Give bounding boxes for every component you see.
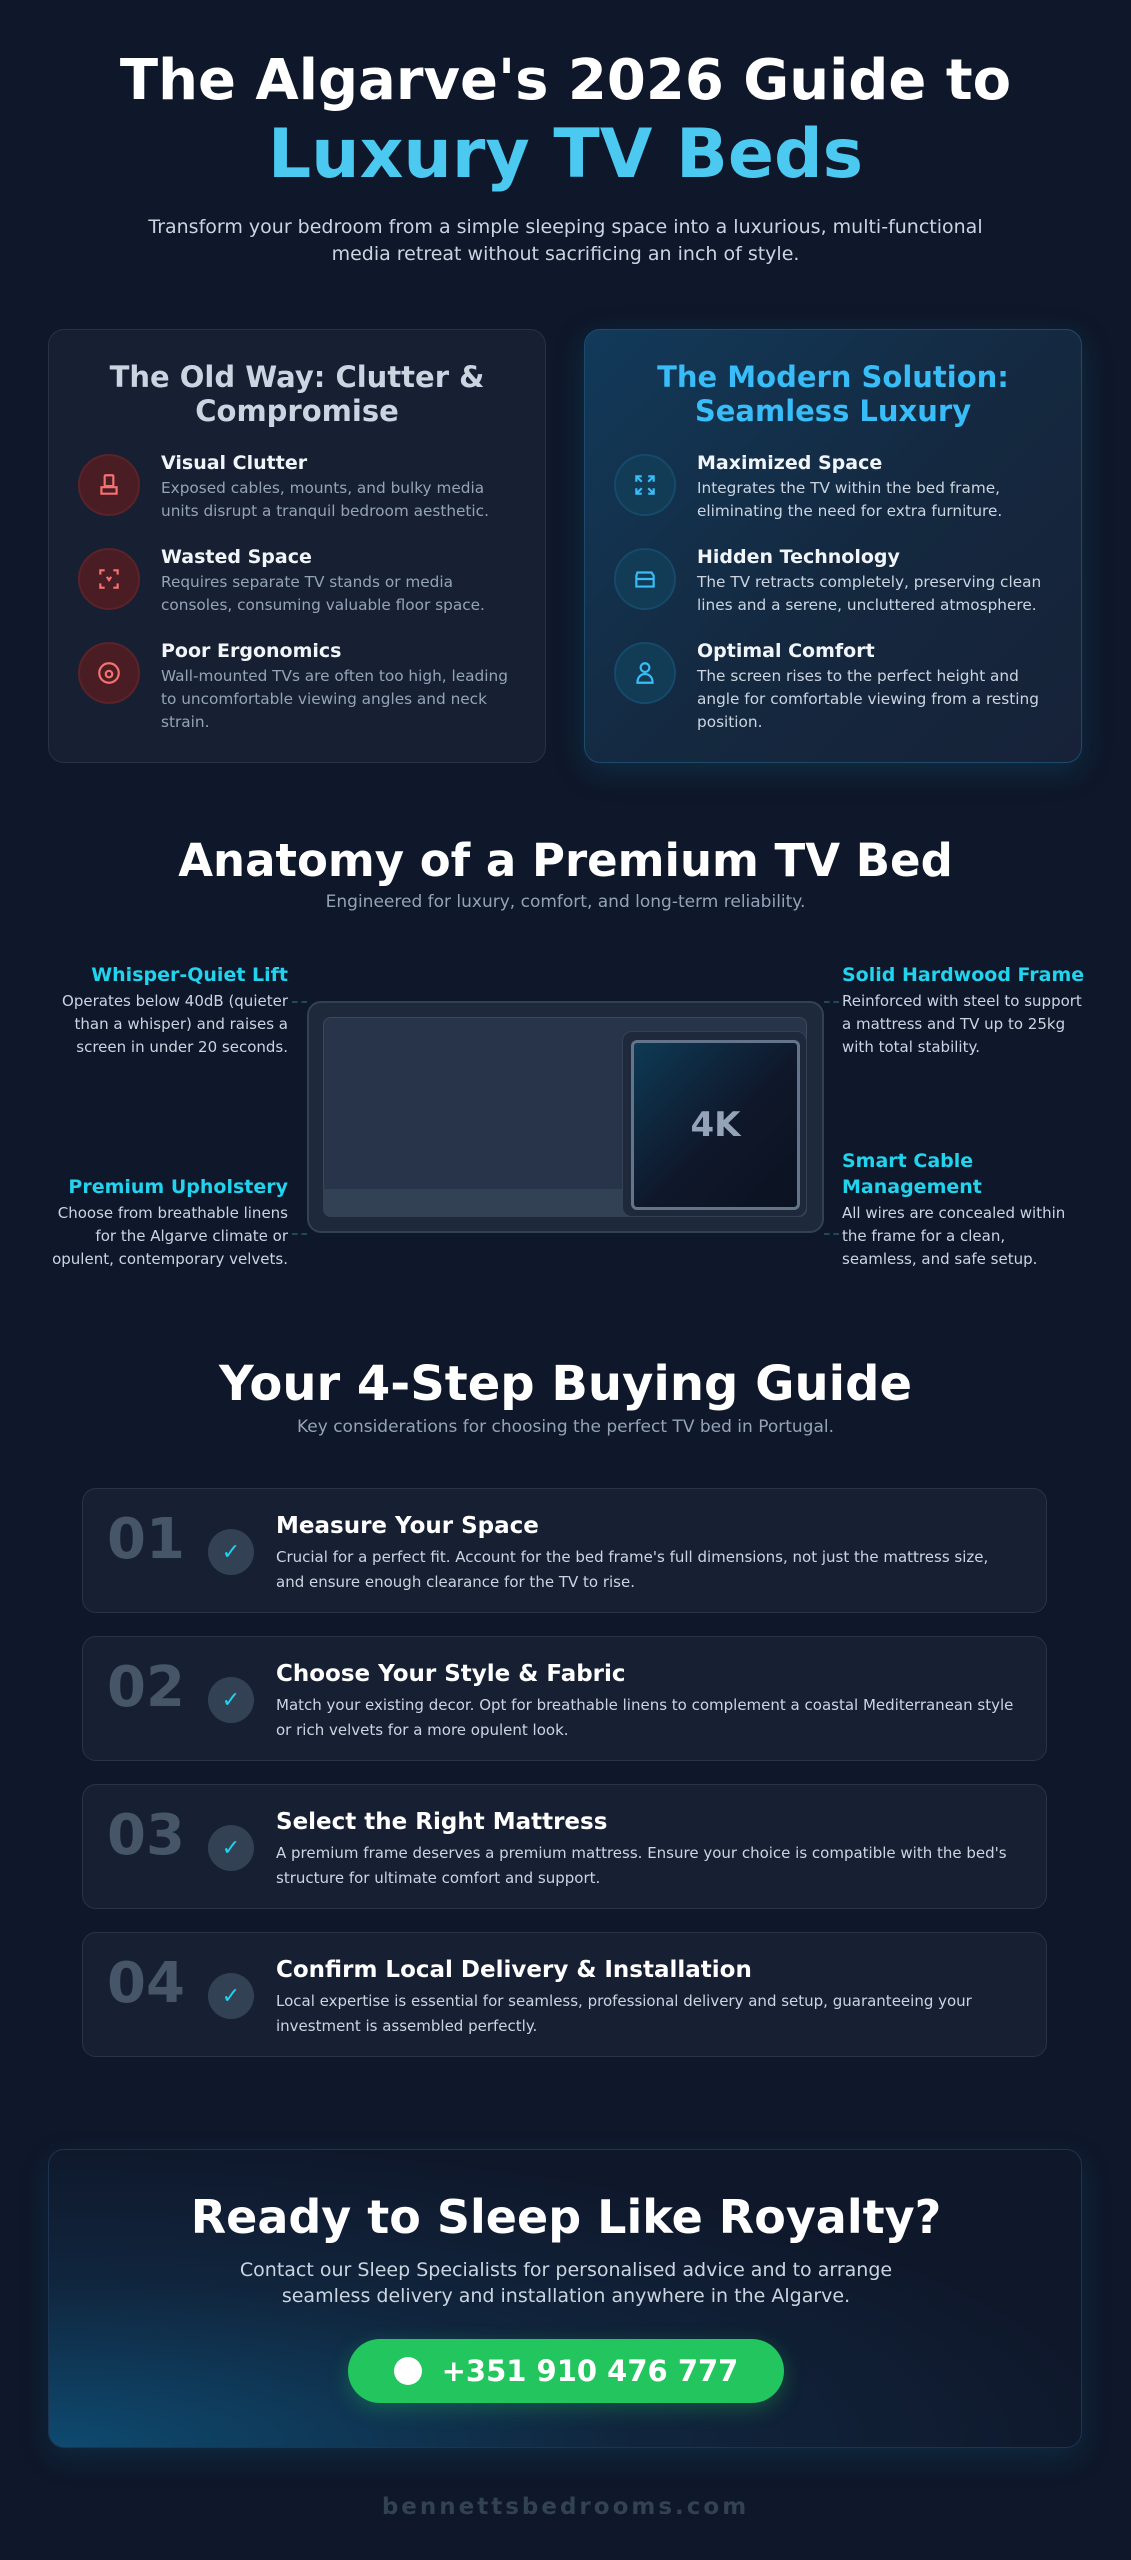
label: smart cable management: All wires are concealed within xyxy=(842,1204,1065,1222)
title xyxy=(120,48,1011,194)
step 2: or rich velvets for a more opulent look. xyxy=(276,1721,569,1739)
subtitle: media retreat without sacrificing an inch of style. xyxy=(332,243,799,265)
label: whisper-quiet lift: than a whisper) and raises a xyxy=(75,1015,288,1033)
panel: modern solution xyxy=(584,329,1082,763)
phone button: +351 910 476 777 xyxy=(442,2354,738,2388)
CTA text: seamless delivery and installation anywhere in the Algarve. xyxy=(282,2285,850,2307)
step 3: structure for ultimate comfort and support. xyxy=(276,1869,600,1887)
panel: CTA xyxy=(48,2149,1082,2448)
step 2 xyxy=(82,1636,1047,1761)
item: wasted space: Wasted Space xyxy=(161,546,312,568)
title: Luxury TV Beds xyxy=(268,115,863,194)
label: premium upholstery: Premium Upholstery xyxy=(68,1176,288,1198)
label: smart cable management: Smart Cable xyxy=(842,1150,973,1172)
panel title: old way: Compromise xyxy=(195,394,399,428)
step 2: Choose Your Style & Fabric xyxy=(276,1661,626,1687)
heading: buying guide: Your 4-Step Buying Guide xyxy=(219,1356,912,1412)
step 3: Select the Right Mattress xyxy=(276,1809,607,1835)
step 1: Measure Your Space xyxy=(276,1513,539,1539)
heading: anatomy: Anatomy of a Premium TV Bed xyxy=(178,834,953,887)
CTA text: Contact our Sleep Specialists for personalised advice and to arrange xyxy=(240,2259,892,2281)
panel title: modern: Seamless Luxury xyxy=(695,394,971,428)
guide subtitle: Key considerations for choosing the perfect TV bed in Portugal. xyxy=(297,1417,834,1437)
panel title: old way: The Old Way: Clutter & xyxy=(110,360,484,394)
step 4: 04 xyxy=(107,1951,185,2016)
step 3: A premium frame deserves a premium mattress. Ensure your choice is compatible with the bed's xyxy=(276,1844,1007,1862)
item: maximized space xyxy=(614,452,1002,520)
label: premium upholstery: Choose from breathable linens xyxy=(58,1204,288,1222)
anatomy subtitle: Engineered for luxury, comfort, and long-term reliability. xyxy=(326,892,805,912)
item: hidden technology: Hidden Technology xyxy=(697,546,900,568)
step 3: ✓ xyxy=(222,1836,240,1860)
item: wasted space xyxy=(78,546,485,614)
label: smart cable management: the frame for a clean, xyxy=(842,1227,1005,1245)
footer: bennettsbedrooms.com xyxy=(382,2494,749,2520)
connector lines xyxy=(292,1001,307,1003)
step 2: Match your existing decor. Opt for breathable linens to complement a coastal Mediterranean style xyxy=(276,1696,1013,1714)
panel: old way xyxy=(48,329,546,763)
title: The Algarve's 2026 Guide to xyxy=(120,48,1011,113)
item: optimal comfort: Optimal Comfort xyxy=(697,640,875,662)
label: smart cable management xyxy=(842,1150,1065,1268)
tv screen 4K: 4K xyxy=(690,1105,740,1145)
label: solid hardwood frame: Reinforced with steel to support xyxy=(842,992,1082,1010)
step 1: 01 xyxy=(107,1507,185,1572)
tv screen 4K xyxy=(622,1031,807,1217)
label: solid hardwood frame xyxy=(842,964,1084,1056)
step 1: ✓ xyxy=(222,1540,240,1564)
step 2: ✓ xyxy=(222,1688,240,1712)
step 4: Local expertise is essential for seamless, professional delivery and setup, guaranteeing your xyxy=(276,1992,972,2010)
step 3 xyxy=(82,1784,1047,1909)
step 1: and ensure enough clearance for the TV to rise. xyxy=(276,1573,635,1591)
label: whisper-quiet lift: screen in under 20 seconds. xyxy=(76,1038,288,1056)
label: solid hardwood frame: a mattress and TV up to 25kg xyxy=(842,1015,1065,1033)
bed illustration xyxy=(307,1001,824,1233)
item: wasted space: Requires separate TV stands or media consoles, consuming valuable floor space. xyxy=(161,573,485,614)
item: hidden technology: The TV retracts completely, preserving clean lines and a serene, uncluttered atmosphere. xyxy=(697,573,1041,614)
item: optimal comfort xyxy=(614,640,1039,731)
panel title: old way xyxy=(110,360,484,428)
label: smart cable management: seamless, and safe setup. xyxy=(842,1250,1037,1268)
label: whisper-quiet lift: Operates below 40dB (quieter xyxy=(62,992,288,1010)
label: solid hardwood frame: with total stability. xyxy=(842,1038,980,1056)
label: whisper-quiet lift xyxy=(62,964,288,1056)
item: visual clutter xyxy=(78,452,489,520)
step 4: Confirm Local Delivery & Installation xyxy=(276,1957,752,1983)
step 2: 02 xyxy=(107,1655,185,1720)
step 3: 03 xyxy=(107,1803,185,1868)
label: smart cable management: Management xyxy=(842,1176,982,1198)
label: premium upholstery: for the Algarve climate or xyxy=(95,1227,288,1245)
panel title: modern xyxy=(657,360,1009,428)
item: maximized space: Maximized Space xyxy=(697,452,882,474)
panel title: modern: The Modern Solution: xyxy=(657,360,1009,394)
item: poor ergonomics xyxy=(78,640,508,731)
subtitle: Transform your bedroom from a simple sleeping space into a luxurious, multi-functional xyxy=(148,216,983,238)
step 4: investment is assembled perfectly. xyxy=(276,2017,537,2035)
phone button xyxy=(348,2339,784,2403)
label: solid hardwood frame: Solid Hardwood Frame xyxy=(842,964,1084,986)
item: optimal comfort: The screen rises to the perfect height and angle for comfortable viewing from a resting position. xyxy=(697,667,1039,731)
CTA text xyxy=(240,2259,892,2307)
label: premium upholstery: opulent, contemporary velvets. xyxy=(52,1250,288,1268)
item: visual clutter: Visual Clutter xyxy=(161,452,307,474)
step 1: Crucial for a perfect fit. Account for the bed frame's full dimensions, not just the mattress size, xyxy=(276,1548,988,1566)
item: poor ergonomics: Wall-mounted TVs are often too high, leading to uncomfortable viewing angles and neck strain. xyxy=(161,667,508,731)
step 4: ✓ xyxy=(222,1984,240,2008)
item: visual clutter: Exposed cables, mounts, and bulky media units disrupt a tranquil bedroom aesthetic. xyxy=(161,479,489,520)
label: whisper-quiet lift: Whisper-Quiet Lift xyxy=(91,964,288,986)
subtitle xyxy=(148,216,983,265)
step 1 xyxy=(82,1488,1047,1613)
label: premium upholstery xyxy=(52,1176,288,1268)
step 4 xyxy=(82,1932,1047,2057)
item: maximized space: Integrates the TV within the bed frame, eliminating the need for extra furniture. xyxy=(697,479,1002,520)
item: poor ergonomics: Poor Ergonomics xyxy=(161,640,341,662)
CTA heading: Ready to Sleep Like Royalty? xyxy=(191,2190,941,2244)
item: hidden technology xyxy=(614,546,1041,614)
